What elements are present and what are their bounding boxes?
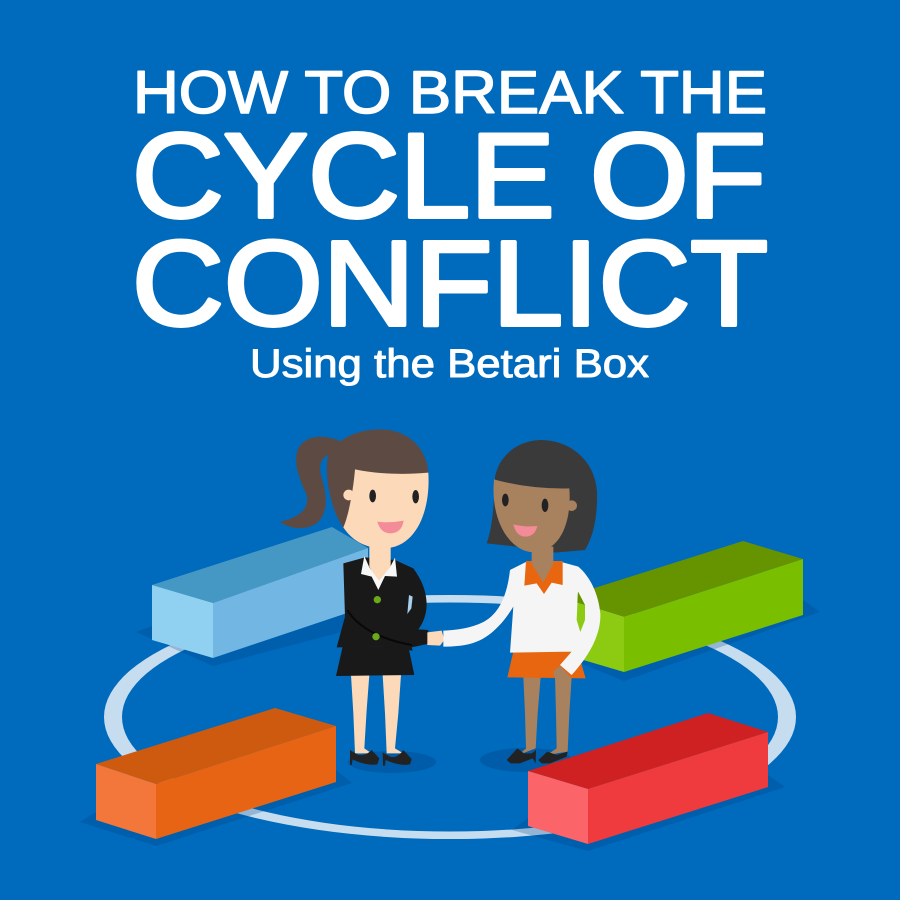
- arm gap: [407, 595, 413, 614]
- hand on hip: [553, 666, 572, 678]
- eyes and mouth: [369, 490, 376, 502]
- buttons: [374, 596, 381, 603]
- jacket: [337, 557, 428, 651]
- face: [343, 469, 429, 548]
- title: CONFLICT: [132, 215, 768, 351]
- box: green: [548, 541, 820, 681]
- skirt: [336, 647, 414, 676]
- hair: [487, 440, 597, 553]
- face: [494, 479, 570, 552]
- foot shadows: [348, 748, 572, 773]
- title: HOW TO BREAK THE: [133, 59, 767, 126]
- box: blue: [136, 527, 368, 666]
- title: [132, 59, 768, 351]
- skirt: [507, 652, 586, 678]
- title: CYCLE OF: [132, 109, 766, 243]
- circular ring path: [104, 595, 796, 839]
- arm line: [347, 610, 412, 645]
- neck: [369, 540, 391, 585]
- box: red: [512, 713, 785, 851]
- collar: [361, 556, 397, 590]
- legs: [351, 675, 372, 753]
- hair: [327, 429, 428, 530]
- shoes: [507, 748, 536, 763]
- subtitle: Using the Betari Box: [250, 342, 649, 386]
- hand: [427, 631, 444, 646]
- ponytail: [280, 437, 342, 528]
- shirt: [443, 562, 600, 675]
- eyes and mouth: [502, 494, 509, 506]
- figures: two women shaking hands: [280, 429, 600, 766]
- shoes: [350, 750, 379, 765]
- arm gap: [577, 592, 585, 632]
- woman in black suit: [280, 429, 444, 766]
- collar: [524, 561, 563, 594]
- box: orange: [80, 708, 352, 846]
- legs: [518, 677, 541, 755]
- neck: [532, 547, 553, 583]
- woman in white shirt: [443, 440, 600, 763]
